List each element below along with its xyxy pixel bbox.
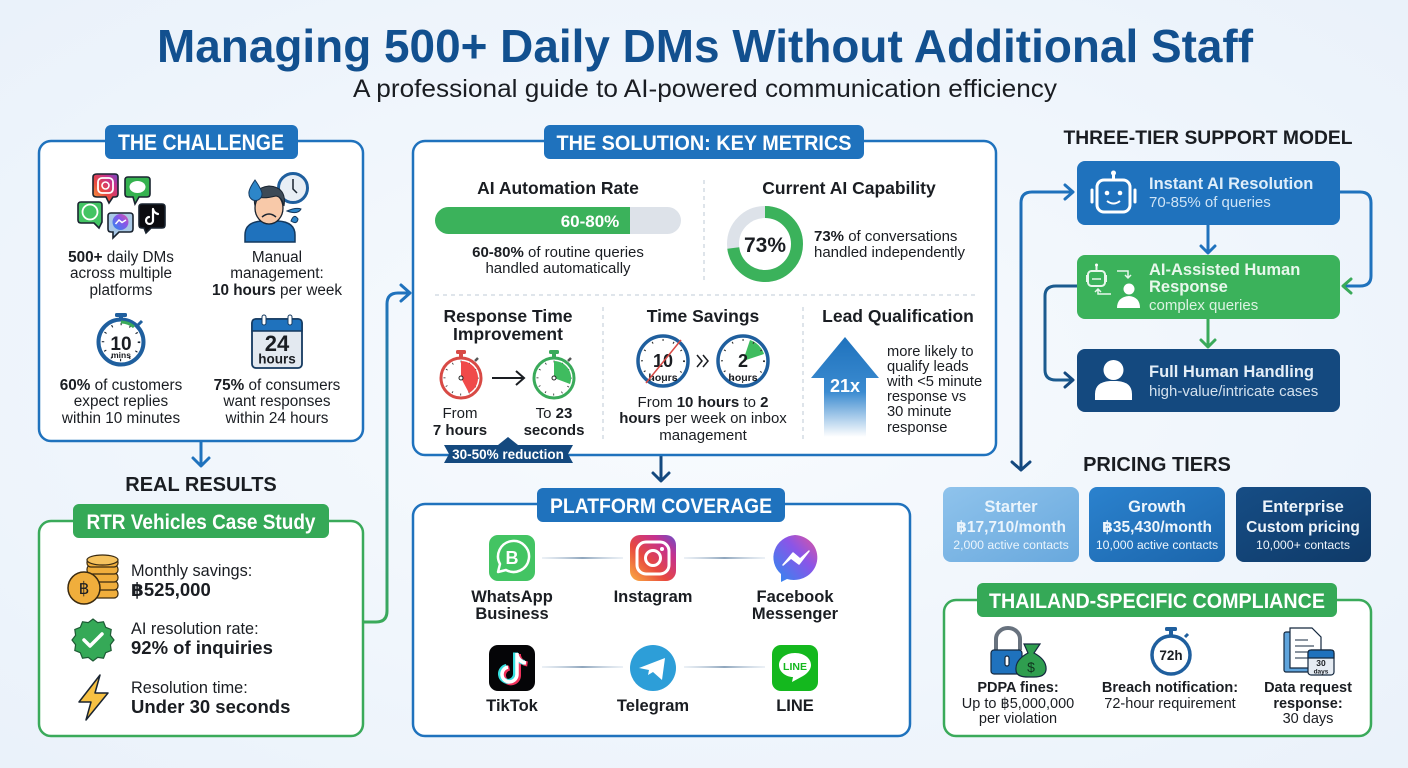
icon: Facebook Messenger bbox=[773, 535, 817, 582]
text: breach notification: 72-hour requirement bbox=[1104, 696, 1236, 712]
label: Facebook Messenger: Facebook bbox=[756, 588, 834, 606]
metric: response time improvement: To 23 bbox=[536, 405, 572, 422]
tier: AI-assisted human response bbox=[1077, 255, 1340, 319]
text: resolution time: Under 30 seconds bbox=[131, 696, 290, 717]
icon: Telegram bbox=[630, 645, 676, 691]
heading: Thailand-specific compliance: THAILAND-SPECIFIC COMPLIANCE bbox=[989, 590, 1325, 613]
icon: 21x up arrow: 21x bbox=[830, 376, 860, 396]
metric: lead qualification: response vs bbox=[887, 389, 966, 405]
icon: stressed person and clock bbox=[245, 174, 308, 242]
metric: AI automation rate: 60-80% of routine queries bbox=[472, 244, 644, 261]
text: 60 percent of customers: 60% of customers bbox=[60, 377, 182, 394]
heading: RTR Vehicles case study bbox=[73, 504, 329, 538]
icon: padlock and money bag: $ bbox=[1027, 659, 1035, 675]
icon: document and 30 days calendar: 30 bbox=[1316, 658, 1326, 668]
label: Telegram: Telegram bbox=[617, 697, 689, 715]
text: 500+ daily DMs: across multiple bbox=[70, 265, 172, 282]
metric: lead qualification: response bbox=[887, 420, 947, 436]
text: breach notification: Breach notification: bbox=[1102, 680, 1238, 696]
metric: AI automation rate: handled automatically bbox=[485, 260, 631, 277]
metric: response time improvement: 7 hours bbox=[433, 422, 487, 439]
heading: key metrics bbox=[544, 125, 864, 159]
metric: response time improvement: Improvement bbox=[453, 324, 563, 344]
card: starter: ฿17,710/month bbox=[956, 519, 1066, 536]
heading: real results: REAL RESULTS bbox=[125, 474, 277, 496]
icon: document and 30 days calendar: days bbox=[1314, 668, 1329, 676]
callout: 30-50 percent reduction bbox=[444, 437, 573, 463]
metric: current AI capability: handled independently bbox=[814, 244, 965, 261]
heading: Thailand-specific compliance bbox=[977, 583, 1337, 617]
heading: RTR Vehicles case study: RTR Vehicles Case Study bbox=[86, 511, 316, 534]
metric: time savings: hours per week on inbox bbox=[619, 410, 787, 427]
metric: response time improvement: seconds bbox=[524, 422, 584, 439]
metric: lead qualification: qualify leads bbox=[887, 359, 969, 375]
icon: robot and human swap bbox=[1087, 264, 1140, 308]
label: TikTok: TikTok bbox=[486, 697, 539, 715]
card: growth bbox=[1089, 487, 1225, 562]
heading: the challenge bbox=[105, 125, 298, 159]
heading: pricing tiers: PRICING TIERS bbox=[1083, 454, 1231, 476]
metric: AI automation rate bbox=[435, 178, 681, 277]
metric: lead qualification: with <5 minute bbox=[886, 374, 982, 390]
subtitle: A professional guide to AI-powered communication efficiency bbox=[353, 75, 1058, 103]
arrow: from 7 hours to 23 seconds bbox=[492, 371, 524, 385]
text: monthly savings: ฿525,000 bbox=[131, 579, 211, 600]
icon: 2 hours clock: hours bbox=[728, 372, 758, 384]
icon: WhatsApp Business: B bbox=[506, 548, 518, 568]
arrows: tier flow bbox=[1012, 185, 1371, 470]
icon: baht coins bbox=[68, 555, 118, 604]
icon: WhatsApp Business bbox=[489, 535, 535, 581]
icon: 24 hours calendar: hours bbox=[258, 352, 296, 366]
text: 500+ daily DMs: 500+ daily DMs bbox=[68, 249, 174, 266]
icon: person bbox=[1095, 360, 1132, 400]
panel: key metrics bbox=[413, 125, 996, 463]
metric: response time improvement: Response Time bbox=[443, 306, 573, 326]
tier: AI-assisted human response: AI-Assisted Human bbox=[1149, 261, 1300, 279]
card: enterprise: Custom pricing bbox=[1246, 519, 1360, 536]
text: 500+ daily DMs: platforms bbox=[90, 282, 153, 299]
text: 60 percent of customers: expect replies bbox=[74, 393, 169, 410]
text: PDPA fines: Up to ฿5,000,000 bbox=[962, 696, 1074, 712]
icon: TikTok bbox=[489, 645, 535, 691]
metric: time savings: Time Savings bbox=[647, 306, 760, 326]
icon: 21x up arrow bbox=[811, 337, 879, 437]
card: enterprise bbox=[1236, 487, 1371, 562]
icon: 10 minute stopwatch bbox=[98, 313, 144, 364]
label: Facebook Messenger: Messenger bbox=[752, 605, 839, 623]
label: Instagram: Instagram bbox=[614, 588, 692, 606]
tier: AI-assisted human response: Response bbox=[1149, 278, 1228, 296]
text: AI resolution rate: 92% of inquiries bbox=[131, 637, 273, 658]
icon: chat platform bubbles bbox=[78, 174, 165, 238]
card: starter bbox=[943, 487, 1079, 562]
card: enterprise: Enterprise bbox=[1262, 498, 1344, 516]
icon: red stopwatch bbox=[441, 350, 481, 398]
text: manual management: management: bbox=[230, 265, 324, 282]
icon: robot bbox=[1092, 170, 1135, 212]
heading: key metrics: THE SOLUTION: KEY METRICS bbox=[556, 132, 852, 155]
progress bar: 60-80 percent bbox=[435, 207, 681, 234]
metric: current AI capability bbox=[733, 178, 965, 276]
metric: response time improvement: From bbox=[442, 405, 478, 422]
text: manual management: 10 hours per week bbox=[212, 282, 342, 299]
icon: LINE bbox=[772, 645, 818, 691]
metric: lead qualification bbox=[811, 306, 982, 437]
metric: response time improvement bbox=[433, 306, 584, 439]
text: 75 percent of consumers: 75% of consumers bbox=[214, 377, 340, 394]
icon: 10 hours clock bbox=[638, 336, 688, 386]
panel: Thailand compliance bbox=[944, 583, 1371, 736]
icon: 10 minute stopwatch: 10 bbox=[110, 334, 132, 355]
icon: 2 hours clock: 2 bbox=[738, 351, 748, 371]
metric: time savings: management bbox=[659, 427, 748, 444]
tier: AI-assisted human response: complex queries bbox=[1149, 297, 1258, 314]
text: data request response: response: bbox=[1273, 696, 1343, 712]
metric: current AI capability: 73% of conversations bbox=[814, 228, 957, 245]
tier: full human handling: Full Human Handling bbox=[1149, 363, 1314, 381]
panel: platform coverage bbox=[413, 488, 910, 736]
icon: chevrons bbox=[697, 355, 708, 367]
panel: case study bbox=[39, 504, 363, 736]
donut chart: 73 percent bbox=[733, 212, 797, 276]
callout: 30-50 percent reduction: 30-50% reduction bbox=[452, 447, 564, 462]
icon: lightning bolt bbox=[79, 675, 108, 720]
label: LINE: LINE bbox=[776, 697, 814, 715]
metric: time savings: From 10 hours to 2 bbox=[638, 394, 768, 411]
icon: document and 30 days calendar bbox=[1284, 628, 1334, 676]
metric: time savings bbox=[619, 306, 787, 444]
metric: lead qualification: 30 minute bbox=[887, 404, 952, 420]
text: data request response: Data request bbox=[1264, 680, 1352, 696]
icon: baht coins: ฿ bbox=[79, 579, 89, 598]
icon: padlock and money bag bbox=[991, 628, 1046, 677]
heading: three-tier support model: THREE-TIER SUPPORT MODEL bbox=[1064, 128, 1353, 149]
metric: current AI capability: Current AI Capability bbox=[762, 178, 936, 198]
arrow: challenge to real results bbox=[193, 442, 209, 466]
icon: 72 hour stopwatch bbox=[1152, 627, 1190, 674]
heading: platform coverage: PLATFORM COVERAGE bbox=[550, 495, 772, 518]
text: PDPA fines: per violation bbox=[979, 711, 1057, 727]
text: 75 percent of consumers: want responses bbox=[222, 393, 331, 410]
card: growth: 10,000 active contacts bbox=[1096, 538, 1218, 552]
icon: 2 hours clock bbox=[718, 336, 768, 386]
card: starter: Starter bbox=[984, 498, 1038, 516]
card: growth: ฿35,430/month bbox=[1102, 519, 1212, 536]
title: Managing 500+ Daily DMs Without Additional Staff bbox=[157, 20, 1254, 72]
tier: instant AI resolution: 70-85% of queries bbox=[1149, 194, 1271, 211]
card: growth: Growth bbox=[1128, 498, 1186, 516]
panel: the challenge bbox=[39, 125, 363, 441]
label: WhatsApp Business: WhatsApp bbox=[471, 588, 553, 606]
label: WhatsApp Business: Business bbox=[475, 605, 549, 623]
tier: full human handling bbox=[1077, 349, 1340, 412]
text: AI resolution rate: AI resolution rate: bbox=[131, 620, 259, 638]
heading: platform coverage bbox=[537, 488, 785, 522]
donut chart: 73 percent: 73% bbox=[744, 234, 786, 257]
text: manual management: Manual bbox=[252, 249, 302, 266]
tier: instant AI resolution: Instant AI Resolution bbox=[1149, 175, 1313, 193]
text: monthly savings: Monthly savings: bbox=[131, 562, 252, 580]
text: PDPA fines: PDPA fines: bbox=[977, 680, 1059, 696]
icon: 72 hour stopwatch: 72h bbox=[1159, 648, 1183, 663]
heading: the challenge: THE CHALLENGE bbox=[118, 130, 284, 155]
metric: AI automation rate: AI Automation Rate bbox=[477, 178, 639, 198]
text: resolution time: Resolution time: bbox=[131, 679, 248, 697]
icon: 10 hours clock: 10 bbox=[653, 351, 673, 371]
metric: lead qualification: Lead Qualification bbox=[822, 306, 974, 326]
card: enterprise: 10,000+ contacts bbox=[1256, 538, 1350, 552]
icon: LINE: LINE bbox=[783, 661, 807, 673]
metric: lead qualification: more likely to bbox=[887, 344, 974, 360]
text: data request response: 30 days bbox=[1283, 711, 1333, 727]
text: 75 percent of consumers: within 24 hours bbox=[225, 410, 329, 427]
progress bar: 60-80 percent: 60-80% bbox=[561, 212, 619, 231]
icon: verified badge bbox=[72, 619, 114, 661]
tier: full human handling: high-value/intricate cases bbox=[1149, 383, 1318, 400]
icon: Instagram bbox=[630, 535, 676, 581]
icon: green stopwatch bbox=[534, 350, 574, 398]
icon: 10 minute stopwatch: mins bbox=[111, 350, 131, 360]
arrow: case study to solution bbox=[364, 285, 410, 622]
icon: 10 hours clock: hours bbox=[648, 372, 678, 384]
text: 60 percent of customers: within 10 minutes bbox=[61, 410, 180, 427]
icon: 24 hours calendar bbox=[252, 315, 302, 368]
arrow: solution to platform coverage bbox=[653, 456, 669, 481]
tier: instant AI resolution bbox=[1077, 161, 1340, 225]
card: starter: 2,000 active contacts bbox=[953, 538, 1069, 552]
icon: 24 hours calendar: 24 bbox=[265, 331, 290, 356]
